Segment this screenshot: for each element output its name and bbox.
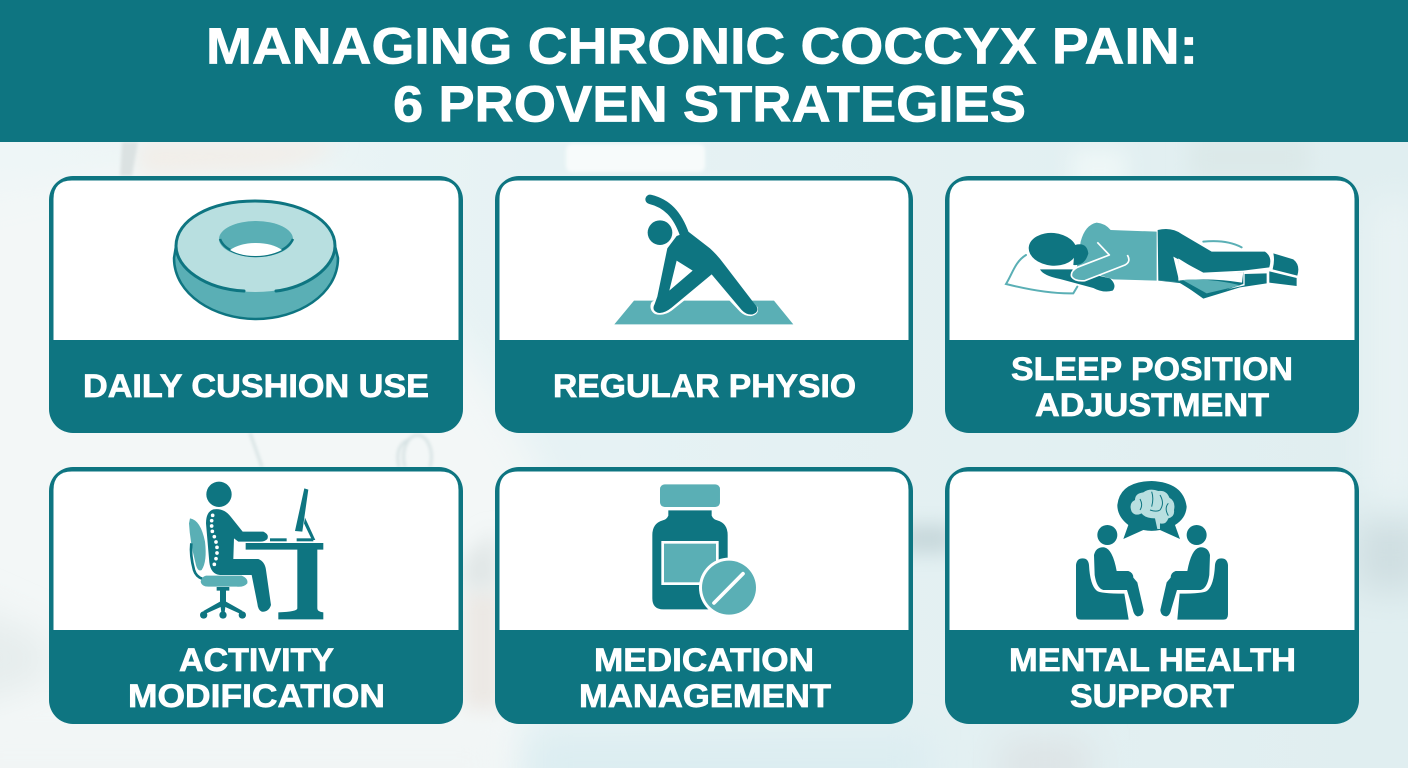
label: sleep position adjustment: [1011, 351, 1293, 423]
label: mental health support: SUPPORT: [1070, 678, 1234, 714]
icon: person sleeping on side with pillow: [1006, 223, 1298, 299]
icon: two people in conversation with brain speech bubble: [1076, 481, 1228, 620]
label: medication management: MEDICATION: [594, 642, 814, 678]
panel: regular physio: [495, 176, 913, 433]
panel: activity modification: [49, 467, 463, 724]
label: mental health support: [1009, 642, 1296, 714]
label: regular physio: REGULAR PHYSIO: [553, 368, 856, 404]
title banner: [0, 0, 1408, 142]
label: daily cushion use: DAILY CUSHION USE: [83, 368, 429, 404]
label: activity modification: [128, 642, 385, 714]
icon: side-bend yoga pose on mat: [614, 199, 793, 324]
label: mental health support: MENTAL HEALTH: [1009, 642, 1296, 678]
panel: daily cushion use: [49, 176, 463, 433]
title line 1: MANAGING CHRONIC COCCYX PAIN:: [206, 18, 1198, 74]
label: sleep position adjustment: ADJUSTMENT: [1035, 387, 1269, 423]
label: medication management: [579, 642, 831, 714]
panel: mental health support: [945, 467, 1359, 724]
icon: medicine bottle and pill: [652, 484, 759, 618]
label: activity modification: MODIFICATION: [128, 678, 385, 714]
panel: sleep position adjustment: [945, 176, 1359, 433]
panel: medication management: [495, 467, 913, 724]
icon: ring cushion: [174, 200, 338, 319]
label: activity modification: ACTIVITY: [179, 642, 334, 678]
title line 2: 6 PROVEN STRATEGIES: [393, 76, 1026, 132]
label: sleep position adjustment: SLEEP POSITION: [1011, 351, 1293, 387]
icon: person seated at desk with computer: [189, 482, 323, 619]
label: medication management: MANAGEMENT: [579, 678, 831, 714]
